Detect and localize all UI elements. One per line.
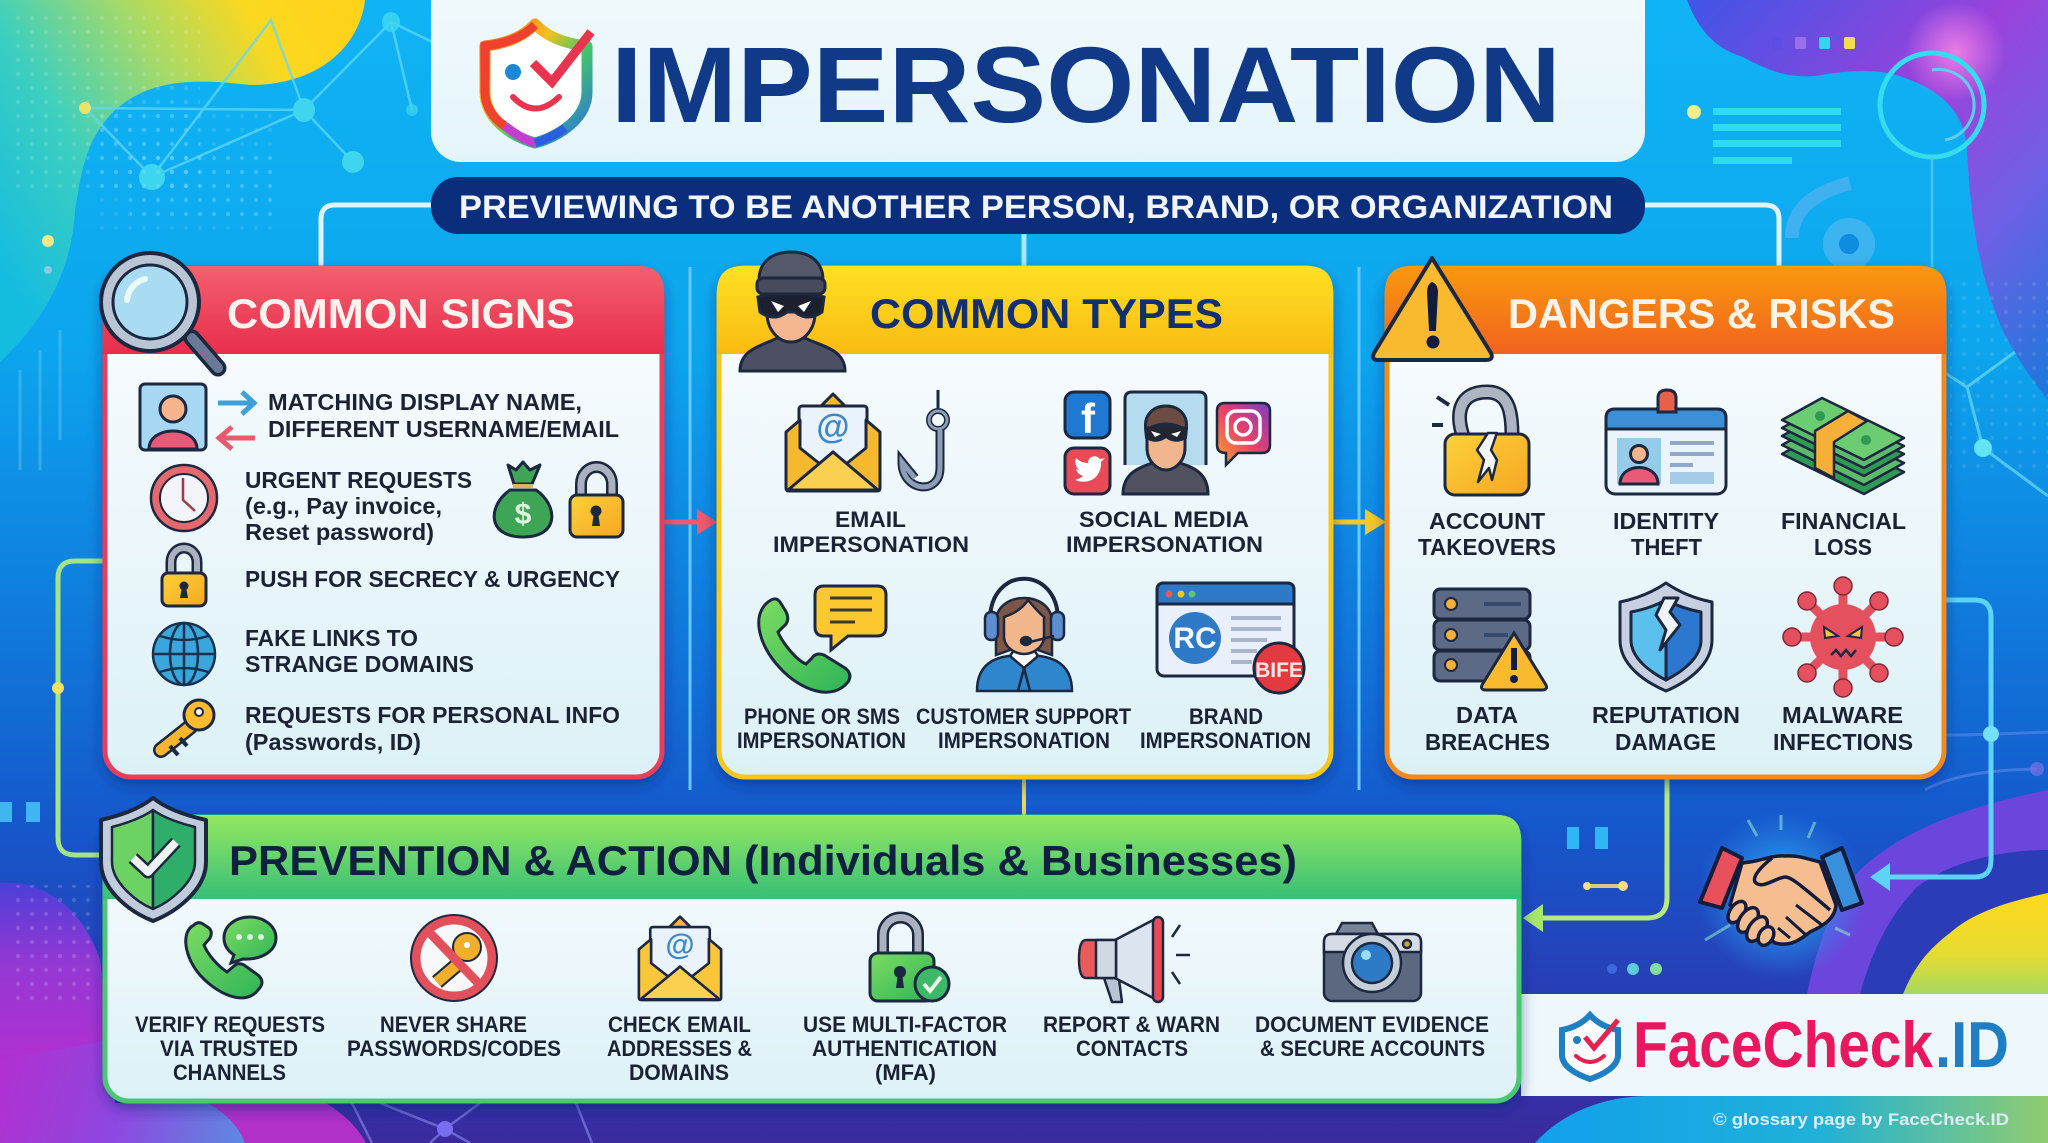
label: data breaches <box>1425 702 1550 755</box>
label: never share: NEVER SHARE <box>380 1012 527 1037</box>
label: report and warn <box>1043 1012 1220 1061</box>
icon: camera <box>1324 923 1421 1001</box>
label: social media impersonation: IMPERSONATION <box>1066 532 1263 557</box>
text: urgent requests: (e.g., Pay invoice, <box>245 493 442 519</box>
label: never share: PASSWORDS/CODES <box>347 1036 561 1061</box>
label: multi-factor: AUTHENTICATION <box>812 1036 997 1061</box>
text: urgent requests <box>245 467 472 545</box>
label: identity theft <box>1613 508 1719 560</box>
icon: fake brand browser: RC <box>1173 622 1217 655</box>
label: email impersonation: IMPERSONATION <box>773 532 969 557</box>
label: customer support <box>916 704 1132 753</box>
icon: money bag: $ <box>515 498 532 531</box>
text: matching display name: DIFFERENT USERNAME/EMAIL <box>268 416 619 442</box>
icon: megaphone <box>1079 917 1190 1002</box>
label: document evidence: & SECURE ACCOUNTS <box>1260 1036 1485 1061</box>
connector lines <box>58 205 1991 918</box>
subtitle pill <box>431 177 1645 234</box>
label: check email: ADDRESSES & <box>607 1036 752 1061</box>
icon: virus <box>1783 577 1903 697</box>
title: IMPERSONATION <box>611 24 1561 145</box>
icon: fish hook <box>902 390 947 487</box>
subtitle pill: PREVIEWING TO BE ANOTHER PERSON, BRAND, OR ORGANIZATION <box>459 189 1613 225</box>
icon: globe <box>153 623 215 685</box>
label: account takeovers: ACCOUNT <box>1429 508 1545 534</box>
brand name: FaceCheck <box>1633 1008 1934 1081</box>
label: data breaches: BREACHES <box>1425 729 1550 755</box>
icon: warning triangle <box>1373 258 1492 360</box>
label: brand impersonation: IMPERSONATION <box>1140 728 1311 753</box>
label: never share <box>347 1012 561 1061</box>
icon: check email envelope: @ <box>665 929 695 961</box>
icon: server with warning <box>1434 589 1546 690</box>
label: report and warn: CONTACTS <box>1076 1036 1188 1061</box>
icon: masked hacker <box>740 252 845 371</box>
label: customer support: CUSTOMER SUPPORT <box>916 704 1132 729</box>
icon: fake brand browser: BIFE <box>1255 659 1303 682</box>
label: social media impersonation <box>1066 507 1263 557</box>
label: multi-factor <box>803 1012 1007 1085</box>
icon: handshake <box>1697 810 1867 980</box>
icon: green shield check <box>101 798 206 921</box>
label: reputation damage: REPUTATION <box>1592 702 1740 728</box>
label: social media impersonation: SOCIAL MEDIA <box>1079 507 1249 532</box>
text: matching display name <box>268 389 619 442</box>
icon: email envelope: @ <box>816 408 850 446</box>
label: document evidence <box>1255 1012 1489 1061</box>
icon: fake brand browser <box>1157 583 1304 693</box>
icon: masked profile <box>1123 392 1208 494</box>
text: fake links: STRANGE DOMAINS <box>245 651 474 677</box>
label: verify requests: VERIFY REQUESTS <box>135 1012 325 1037</box>
label: account takeovers <box>1418 508 1556 560</box>
icon: yellow speech bubble <box>815 586 886 650</box>
icon: support agent <box>977 579 1072 691</box>
icon: magnifier <box>101 253 218 368</box>
label: financial loss: LOSS <box>1814 534 1872 560</box>
icon: rainbow shield logo <box>485 24 591 143</box>
icon: padlock small <box>162 548 206 606</box>
icon: cash stack <box>1782 398 1904 494</box>
icon: padlock large <box>570 467 623 537</box>
label: customer support: IMPERSONATION <box>938 728 1110 753</box>
arrows between panels <box>663 509 1890 932</box>
icon: money bag <box>494 462 552 537</box>
label: malware infections <box>1773 702 1913 755</box>
heading: DANGERS & RISKS <box>1508 290 1895 337</box>
label: document evidence: DOCUMENT EVIDENCE <box>1255 1012 1489 1037</box>
text: matching display name: MATCHING DISPLAY NAME, <box>268 389 582 415</box>
icon: id card <box>1606 390 1726 494</box>
label: email impersonation <box>773 507 969 557</box>
icon: no password key <box>411 915 497 1001</box>
label: phone or sms: IMPERSONATION <box>737 728 906 753</box>
icon: phone verify <box>186 917 276 998</box>
text: requests for personal info <box>245 702 620 755</box>
label: account takeovers: TAKEOVERS <box>1418 534 1556 560</box>
label: verify requests <box>135 1012 325 1085</box>
icon: email envelope <box>786 394 880 491</box>
panel: dangers and risks <box>1373 258 1946 777</box>
text: urgent requests: URGENT REQUESTS <box>245 467 472 493</box>
icon: key <box>161 700 214 755</box>
label: email impersonation: EMAIL <box>835 507 906 532</box>
label: malware infections: INFECTIONS <box>1773 729 1913 755</box>
icon: clock <box>151 465 217 531</box>
label: data breaches: DATA <box>1456 702 1518 728</box>
icon: person card with arrows <box>140 384 255 450</box>
label: multi-factor: (MFA) <box>875 1060 936 1085</box>
label: check email <box>607 1012 752 1085</box>
icon: instagram <box>1217 403 1270 465</box>
label: reputation damage: DAMAGE <box>1615 729 1716 755</box>
text: urgent requests: Reset password) <box>245 519 434 545</box>
footer credit: © glossary page by FaceCheck.ID <box>1713 1110 2009 1129</box>
text: fake links <box>245 625 474 677</box>
label: brand impersonation <box>1140 704 1311 753</box>
title panel <box>431 0 1645 162</box>
label: verify requests: CHANNELS <box>173 1060 286 1085</box>
label: multi-factor: USE MULTI-FACTOR <box>803 1012 1007 1037</box>
icon: facebook: f <box>1081 395 1096 442</box>
icon: green phone <box>759 599 850 692</box>
icon: facebook <box>1065 392 1110 442</box>
heading: COMMON SIGNS <box>227 290 575 337</box>
logo banner: .ID <box>1935 1008 2009 1081</box>
label: phone or sms: PHONE OR SMS <box>744 704 900 729</box>
label: check email: CHECK EMAIL <box>608 1012 751 1037</box>
heading: COMMON TYPES <box>870 290 1223 337</box>
label: identity theft: THEFT <box>1631 534 1702 560</box>
logo banner <box>1521 994 2048 1096</box>
label: identity theft: IDENTITY <box>1613 508 1719 534</box>
text: requests for personal info: REQUESTS FOR PERSONAL INFO <box>245 702 620 728</box>
text: fake links: FAKE LINKS TO <box>245 625 418 651</box>
heading: PREVENTION & ACTION (Individuals & Businesses) <box>229 837 1297 884</box>
icon: small shield logo <box>1562 1015 1618 1079</box>
icon: cracked shield <box>1620 583 1712 691</box>
text: requests for personal info: (Passwords, ID) <box>245 729 421 755</box>
label: reputation damage <box>1592 702 1740 755</box>
label: verify requests: VIA TRUSTED <box>160 1036 298 1061</box>
label: financial loss <box>1781 508 1906 560</box>
panel: common types <box>717 252 1333 777</box>
icon: check email envelope <box>639 917 721 1000</box>
text: push for secrecy: PUSH FOR SECRECY & URGENCY <box>245 566 620 592</box>
label: check email: DOMAINS <box>629 1060 729 1085</box>
icon: mfa lock <box>870 918 949 1001</box>
icon: twitter bird <box>1065 448 1110 494</box>
label: phone or sms <box>737 704 906 753</box>
label: report and warn: REPORT & WARN <box>1043 1012 1220 1037</box>
label: brand impersonation: BRAND <box>1189 704 1263 729</box>
icon: broken lock <box>1432 392 1529 495</box>
label: malware infections: MALWARE <box>1782 702 1903 728</box>
label: financial loss: FINANCIAL <box>1781 508 1906 534</box>
panel: common signs <box>101 253 664 777</box>
panel: prevention and action <box>101 798 1521 1101</box>
